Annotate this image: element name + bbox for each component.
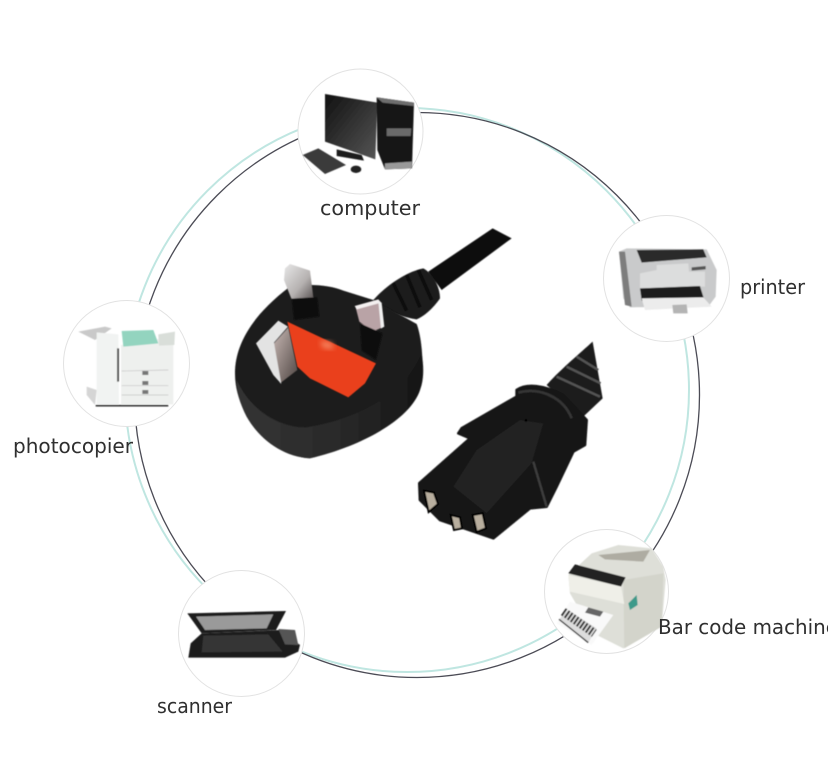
label: photocopier: photocopier: [13, 434, 134, 458]
red shutter panel: [287, 322, 376, 397]
icon: photocopier: [78, 327, 175, 406]
label: printer: printer: [740, 275, 806, 299]
brass pins: [256, 264, 384, 384]
icon: computer: [303, 94, 414, 174]
icon: barcode printer: [557, 545, 666, 648]
label: scanner: scanner: [157, 694, 233, 718]
device: barcode machine: [544, 530, 668, 654]
device: scanner: [178, 570, 304, 696]
icon: scanner: [187, 611, 300, 658]
device: printer: [604, 216, 730, 342]
UK plug and cord: [235, 228, 512, 458]
device: computer: [298, 69, 423, 194]
cord: [373, 228, 512, 319]
plug body: [235, 285, 423, 458]
C13 connector: [419, 342, 603, 538]
icon: printer: [619, 248, 717, 313]
device: photocopier: [64, 300, 190, 426]
connection ring: [125, 108, 700, 678]
label: computer: computer: [320, 196, 421, 220]
socket holes: [424, 491, 438, 512]
